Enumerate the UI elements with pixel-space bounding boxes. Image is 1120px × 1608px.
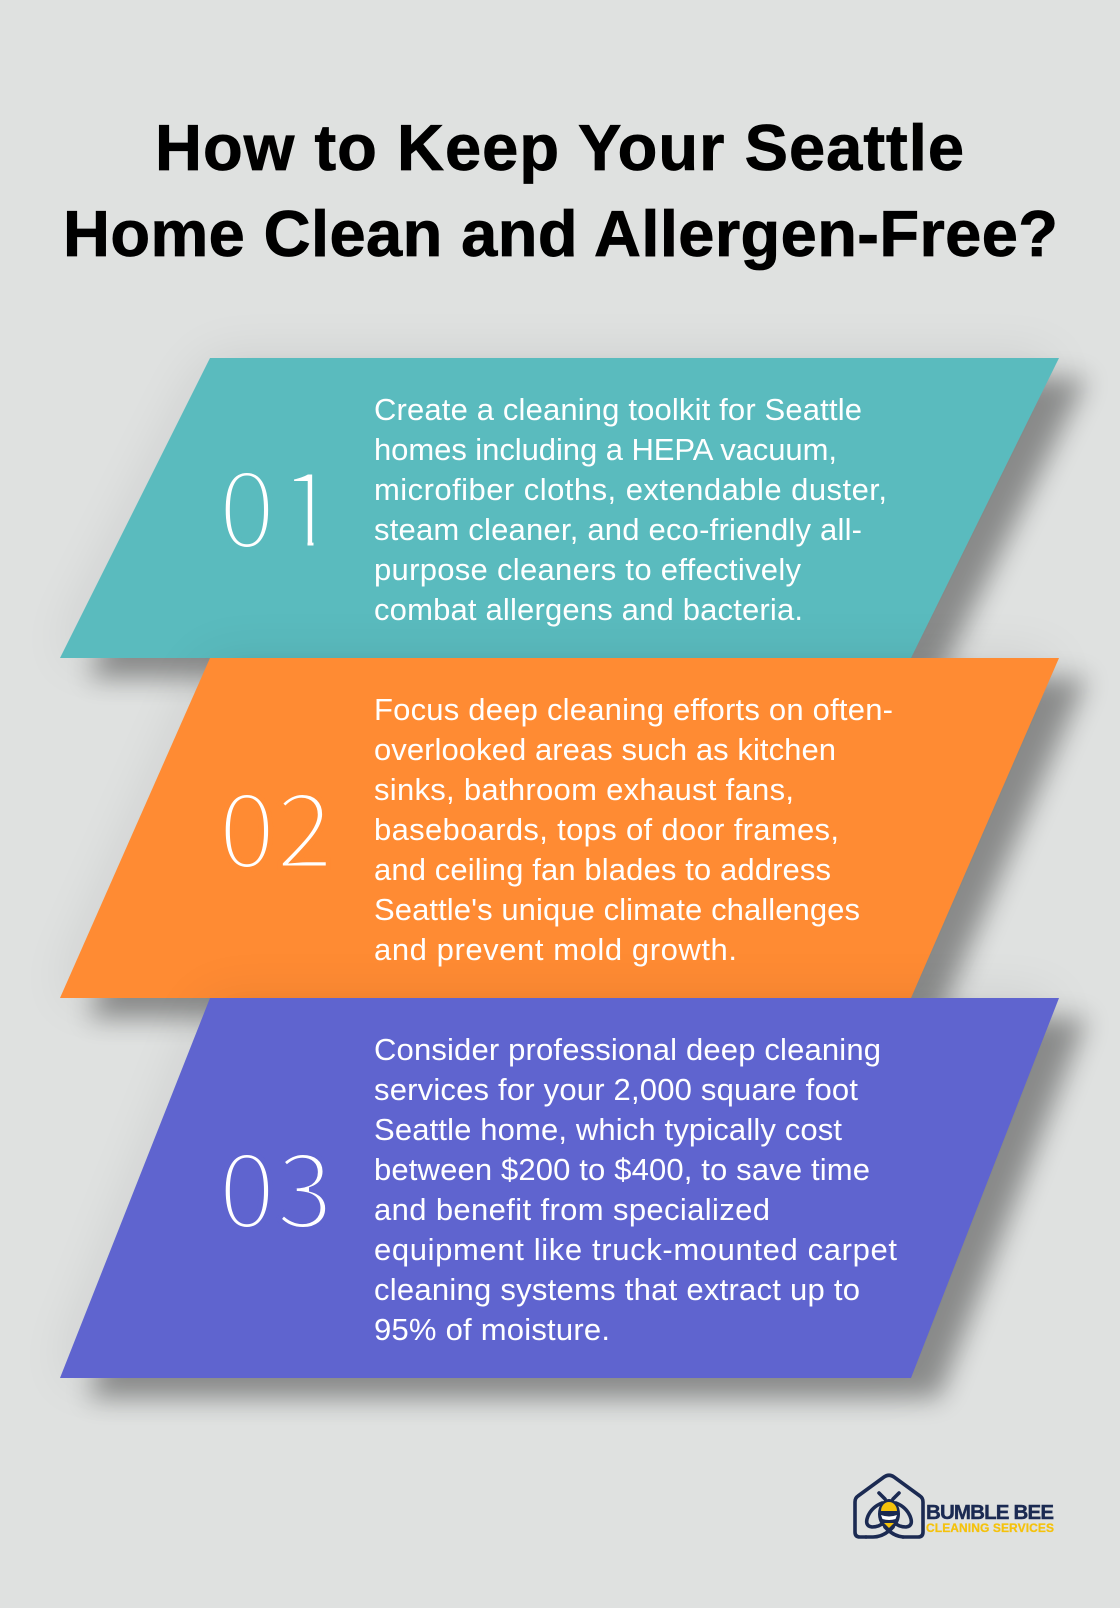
text: step 02 [374, 692, 893, 967]
text: step 02: baseboards, tops of door frames, [374, 812, 839, 847]
text: step 03: Seattle home, which typically cost [374, 1112, 842, 1147]
text: step 02: and ceiling fan blades to address [374, 852, 831, 887]
logo wordmark: BUMBLE BEE [926, 1501, 1054, 1524]
text: step 03: Consider professional deep cleaning [374, 1032, 881, 1067]
text: step 01: steam cleaner, and eco-friendly all- [374, 512, 862, 547]
text: step 03: between $200 to $400, to save time [374, 1152, 870, 1187]
text: step 03: cleaning systems that extract up to [374, 1272, 860, 1307]
text: step 01: microfiber cloths, extendable duster, [374, 472, 887, 507]
text: step 03: 95% of moisture. [374, 1312, 610, 1347]
title: How to Keep Your Seattle [155, 111, 964, 184]
text: step 02: Seattle's unique climate challenges [374, 892, 860, 927]
number 01: 01 [218, 427, 337, 578]
number 03: 03 [218, 1107, 333, 1258]
logo tagline: CLEANING SERVICES [926, 1521, 1054, 1535]
number 02: 02 [218, 747, 333, 898]
title [63, 111, 1058, 270]
title: Home Clean and Allergen-Free? [63, 197, 1058, 270]
text: step 02: and prevent mold growth. [374, 932, 737, 967]
text: step 01: homes including a HEPA vacuum, [374, 432, 837, 467]
text: step 03: equipment like truck-mounted carpet [374, 1232, 897, 1267]
text: step 01: Create a cleaning toolkit for Seattle [374, 392, 862, 427]
text: step 02: overlooked areas such as kitchen [374, 732, 836, 767]
text: step 03 [374, 1032, 897, 1347]
panel: step 01 [60, 358, 1087, 678]
panel: step 02 [60, 658, 1087, 1018]
text: step 02: sinks, bathroom exhaust fans, [374, 772, 794, 807]
icon: house with bee [855, 1475, 923, 1537]
text: step 01: purpose cleaners to effectively [374, 552, 802, 587]
text: step 03: and benefit from specialized [374, 1192, 770, 1227]
panel: step 03 [60, 998, 1087, 1398]
text: step 01 [374, 392, 887, 627]
text: step 03: services for your 2,000 square foot [374, 1072, 858, 1107]
logo: Bumble Bee Cleaning Services [855, 1475, 1054, 1537]
text: step 01: combat allergens and bacteria. [374, 592, 803, 627]
text: step 02: Focus deep cleaning efforts on often- [374, 692, 893, 727]
